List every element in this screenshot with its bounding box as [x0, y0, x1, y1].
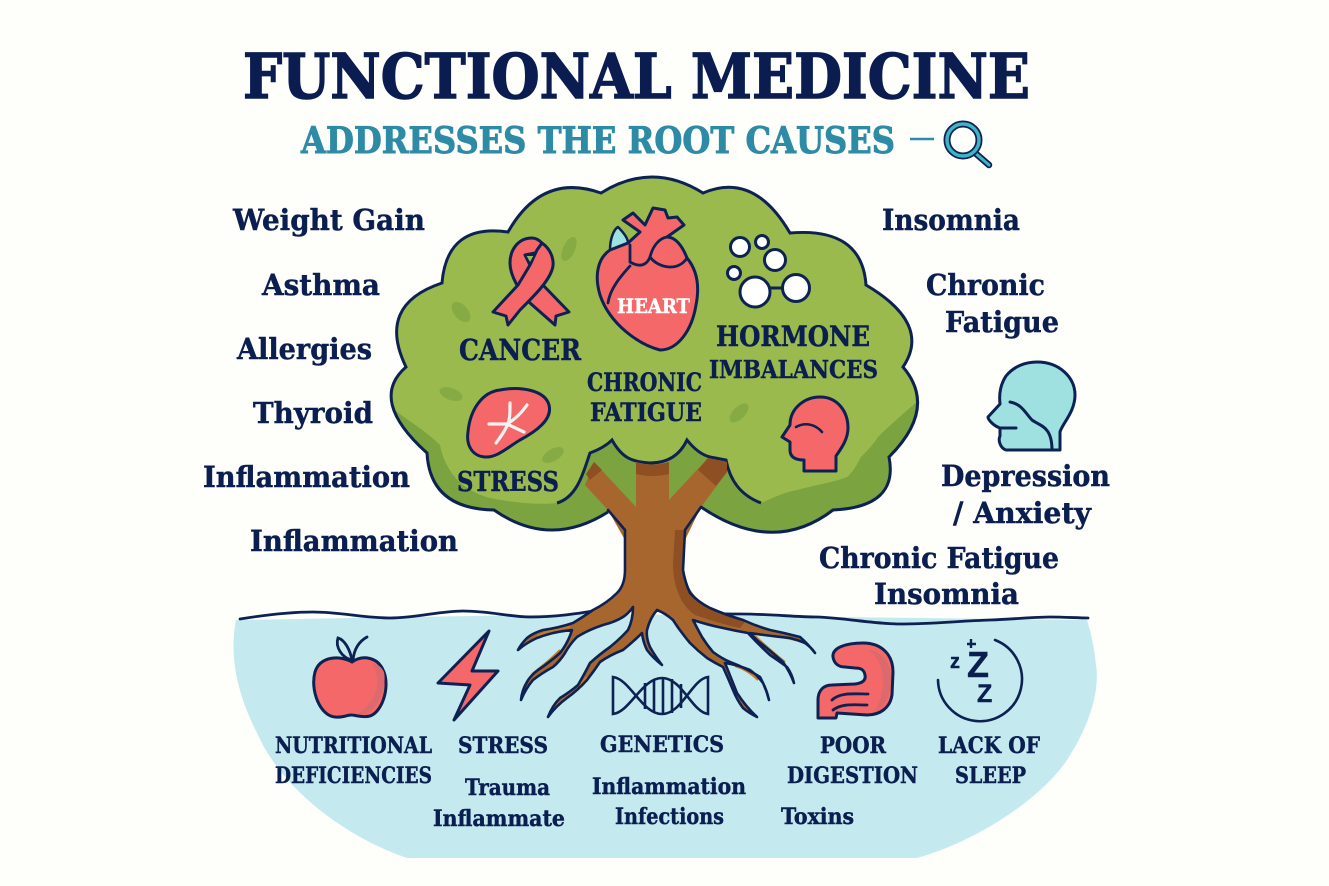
ground line: [240, 610, 1088, 624]
label: stress with trauma: Trauma: [465, 775, 550, 801]
right symptom list: Depression: [941, 459, 1110, 493]
label: chronic fatigue: CHRONIC: [587, 368, 702, 397]
label: genetics: [592, 732, 746, 830]
left symptom list: [203, 203, 458, 558]
roots fill: [518, 507, 815, 717]
subtitle with magnifier: ADDRESSES THE ROOT CAUSES: [300, 120, 895, 162]
icon: heart: HEART: [617, 294, 690, 318]
icon: organ: [468, 389, 550, 457]
left symptom list: Asthma: [261, 268, 380, 302]
icon: heart: [597, 208, 698, 350]
left symptom list: Inflammation: [250, 524, 458, 558]
label: chronic fatigue: [587, 368, 702, 427]
title: FUNCTIONAL MEDICINE: [243, 40, 1030, 113]
icon: red head: [782, 397, 848, 471]
label: poor digestion: DIGESTION: [787, 763, 918, 789]
label: stress with trauma: Inflammate: [433, 806, 565, 832]
icon: stomach: [818, 643, 893, 718]
right symptom list: Insomnia: [874, 577, 1019, 611]
label: lack of sleep: [938, 733, 1040, 789]
left symptom list: Weight Gain: [232, 203, 425, 237]
label: chronic fatigue: FATIGUE: [590, 398, 702, 427]
infographic: functional medicine tree: [204, 52, 1110, 858]
trunk and roots: [518, 458, 815, 717]
right symptom list: / Anxiety: [953, 496, 1092, 530]
label: poor digestion: [781, 733, 918, 830]
icon: apple: [314, 637, 386, 717]
label: hormone imbalances: HORMONE: [716, 320, 870, 353]
label: nutritional deficiencies: [275, 733, 432, 789]
icon: cancer ribbon: [493, 238, 569, 325]
icon: sleep: [938, 639, 1022, 721]
label: cancer: CANCER: [459, 333, 582, 367]
left symptom list: Inflammation: [203, 460, 410, 494]
canopy leaf marks: [438, 235, 752, 466]
right symptom list: Fatigue: [945, 305, 1059, 339]
canopy outline: [391, 177, 918, 532]
icon: lightning bolt: [438, 631, 498, 720]
icon: sleep: Z: [977, 680, 992, 708]
tree canopy: [380, 150, 925, 532]
label: genetics: Inflammation: [592, 774, 746, 800]
right symptom list: [819, 203, 1110, 611]
canopy highlight layer: [392, 178, 916, 504]
label: hormone imbalances: IMBALANCES: [709, 355, 878, 384]
left symptom list: Thyroid: [253, 396, 373, 430]
icon: sleep: Z: [967, 644, 989, 685]
label: nutritional deficiencies: NUTRITIONAL: [275, 733, 432, 759]
label: stress in tree: STRESS: [457, 467, 559, 498]
right symptom list: Insomnia: [882, 203, 1020, 237]
label: nutritional deficiencies: DEFICIENCIES: [275, 763, 432, 789]
root highlight streaks: [532, 627, 803, 703]
water and soil area: [233, 614, 1097, 858]
icon: hormone molecules: [728, 236, 810, 307]
right symptom list: Chronic: [926, 268, 1045, 302]
label: genetics: GENETICS: [600, 732, 724, 758]
icon: dna helix: [613, 677, 708, 714]
label: stress with trauma: STRESS: [458, 733, 548, 759]
label: genetics: Infections: [615, 804, 724, 830]
label: hormone imbalances: [709, 320, 878, 384]
icon: sleep: z: [950, 651, 960, 673]
label: poor digestion: Toxins: [781, 804, 854, 830]
label: stress with trauma: [433, 733, 565, 832]
label: lack of sleep: LACK OF: [938, 733, 1040, 759]
trunk top shading: [586, 458, 727, 486]
right symptom list: Chronic Fatigue: [819, 541, 1059, 575]
label: poor digestion: POOR: [820, 733, 887, 759]
trunk upper fill: [585, 458, 727, 540]
canopy inner arch line: [557, 440, 761, 503]
root outlines: [518, 507, 815, 717]
trunk side shading: [673, 530, 745, 628]
canopy shadow layer: [391, 177, 918, 532]
left symptom list: Allergies: [236, 332, 372, 366]
label: lack of sleep: SLEEP: [955, 763, 1026, 789]
icon: blue head profile: [988, 362, 1075, 450]
